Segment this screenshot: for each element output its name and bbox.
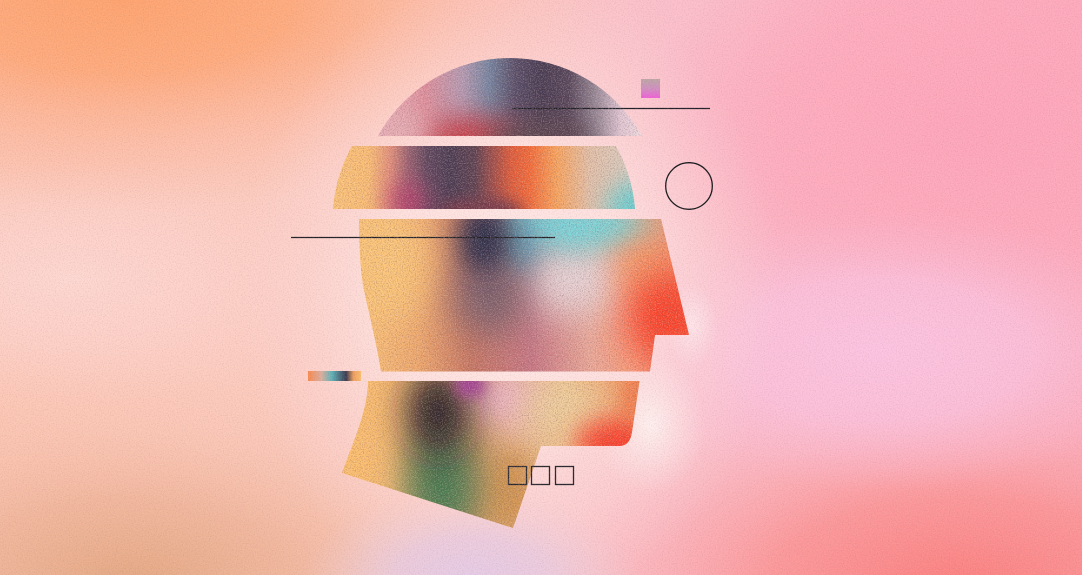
head: main face slice: [359, 219, 689, 372]
head: second slice: [333, 146, 635, 209]
head: lower jaw and neck slice: [342, 381, 640, 528]
three outlined squares: [508, 466, 574, 484]
small gradient square: [641, 79, 660, 98]
outlined circle: [666, 163, 712, 209]
middle horizontal line: [291, 236, 555, 238]
head: top dome slice: [378, 58, 642, 136]
top horizontal line: [512, 108, 710, 110]
small gradient bar: [308, 371, 361, 381]
